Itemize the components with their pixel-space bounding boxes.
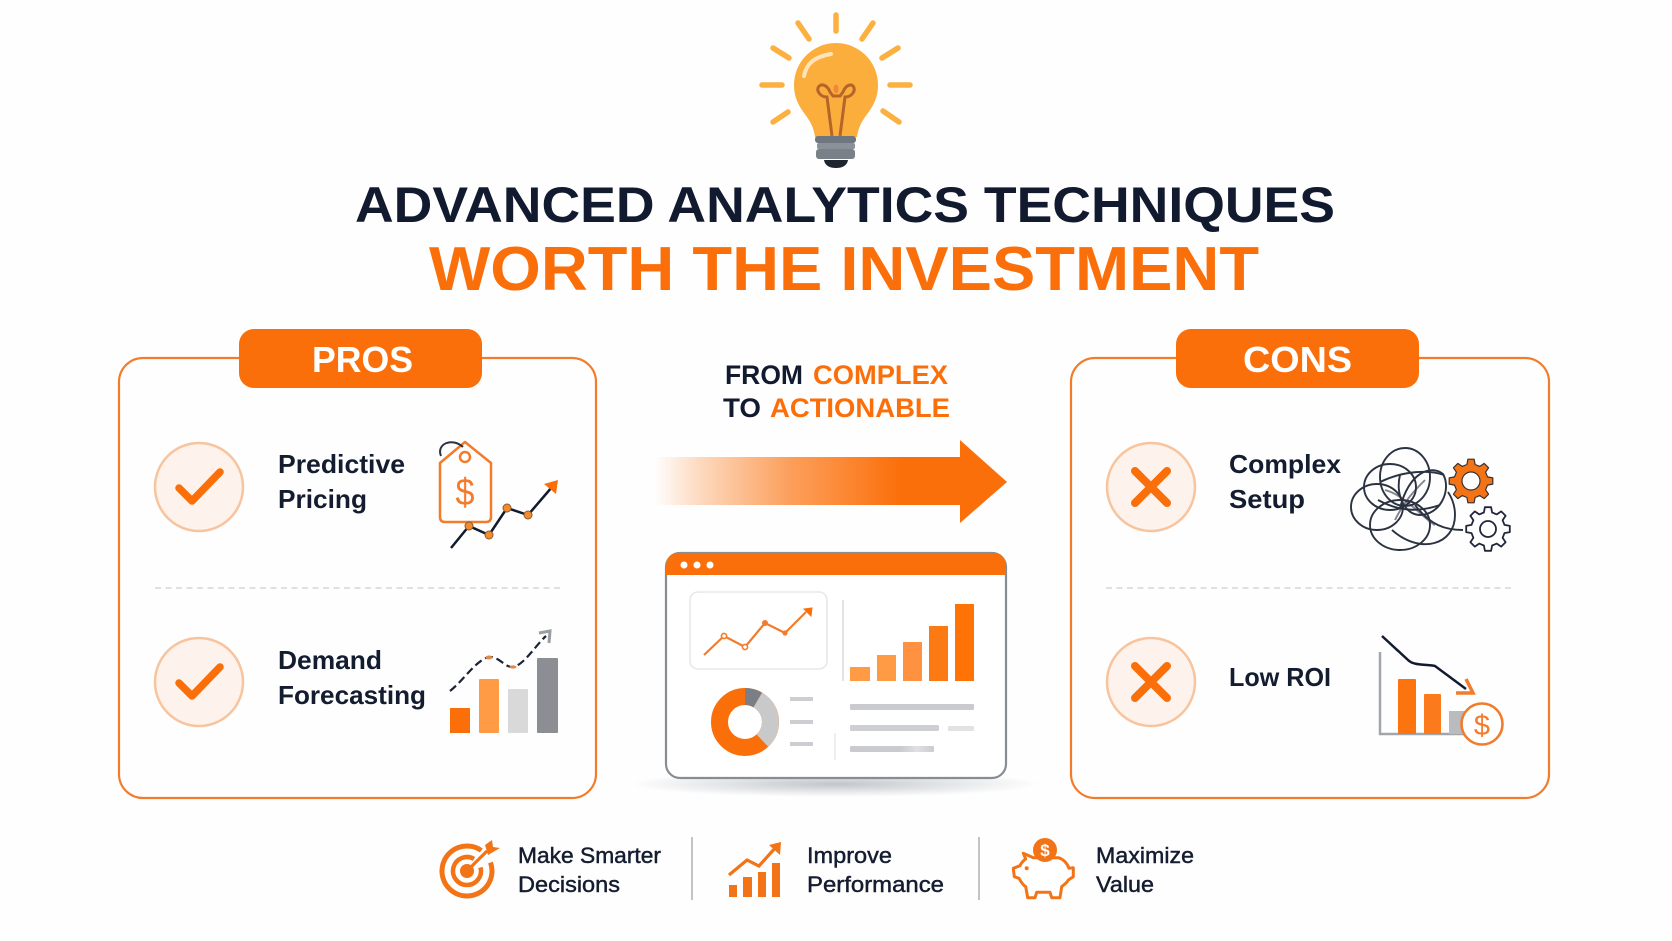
- text: demand forecasting: Demand: [278, 645, 382, 675]
- pros badge: PROS: [312, 339, 413, 380]
- bottom benefits row: [442, 837, 1194, 900]
- benefit: maximize value: Value: [1096, 872, 1154, 897]
- icon: price tag with rising line: $: [456, 472, 474, 514]
- text: demand forecasting: Forecasting: [278, 680, 426, 710]
- benefit: maximize value: Maximize: [1096, 843, 1194, 868]
- dashboard text lines: [835, 704, 974, 760]
- icon: outline gear: [1466, 507, 1510, 551]
- text: predictive pricing: [278, 449, 405, 514]
- text: complex setup: Setup: [1229, 484, 1305, 514]
- dashboard donut chart: [720, 696, 770, 748]
- text: predictive pricing: Pricing: [278, 484, 367, 514]
- benefit: make smarter decisions: [442, 840, 661, 897]
- benefit: improve performance: Improve: [807, 843, 892, 868]
- cons badge: [1176, 329, 1419, 388]
- dashboard bar chart: [843, 600, 974, 681]
- icon: piggy bank with coin: [1013, 838, 1073, 898]
- benefit: make smarter decisions: Decisions: [518, 872, 620, 897]
- center caption: TO: [723, 393, 761, 423]
- icon: piggy bank with coin: $: [1040, 841, 1050, 860]
- center caption: [723, 360, 950, 423]
- panel: pros: [119, 329, 596, 798]
- icon: target with arrow: [442, 840, 500, 896]
- title: [355, 177, 1335, 304]
- dashboard illustration: [630, 553, 1040, 797]
- text: complex setup: [1229, 449, 1342, 514]
- center caption: COMPLEX: [813, 360, 948, 390]
- icon: check predictive pricing: [155, 443, 243, 531]
- text: demand forecasting: [278, 645, 426, 710]
- center caption: ACTIONABLE: [770, 393, 950, 423]
- icon: falling bars and coin: [1380, 636, 1502, 744]
- icon: growth bars with arrow: [729, 842, 781, 897]
- benefit: maximize value: [1013, 838, 1194, 898]
- center caption: FROM: [725, 360, 803, 390]
- dashboard legend lines: [790, 697, 813, 746]
- benefit: make smarter decisions: Make Smarter: [518, 843, 661, 868]
- icon: check demand forecasting: [155, 638, 243, 726]
- benefit: improve performance: Performance: [807, 872, 944, 897]
- icon: light bulb: [762, 15, 910, 168]
- panel: cons: [1071, 329, 1549, 798]
- text: complex setup: Complex: [1229, 449, 1342, 479]
- title line 2: WORTH THE INVESTMENT: [429, 235, 1259, 304]
- cons badge: CONS: [1243, 339, 1352, 380]
- title line 1: ADVANCED ANALYTICS TECHNIQUES: [355, 177, 1335, 233]
- text: low roi: Low ROI: [1229, 662, 1331, 692]
- benefit: improve performance: [729, 842, 944, 897]
- icon: forecast bars: [450, 631, 558, 733]
- dashboard line chart: [690, 592, 827, 669]
- text: predictive pricing: Predictive: [278, 449, 405, 479]
- pros badge: [239, 329, 482, 388]
- icon: tangled lines and gears: [1351, 448, 1510, 551]
- icon: cross complex setup: [1107, 443, 1195, 531]
- icon: orange gear: [1449, 459, 1493, 503]
- dashboard header bar: [666, 553, 1006, 575]
- icon: falling bars and coin: $: [1474, 710, 1490, 742]
- icon: cross low roi: [1107, 638, 1195, 726]
- arrow: complex to actionable: [655, 440, 1007, 523]
- icon: price tag with rising line: [440, 442, 558, 548]
